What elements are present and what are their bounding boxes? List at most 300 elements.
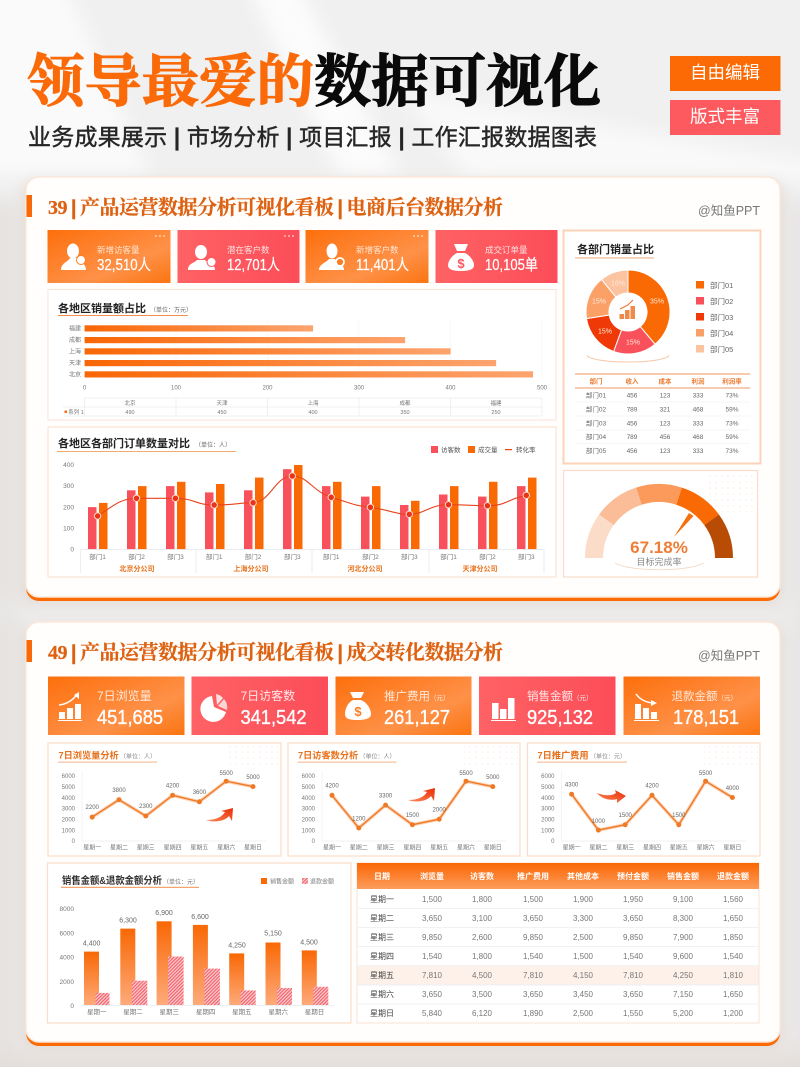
legend: 销售金额 [270,878,294,886]
department table: 123 [660,448,671,455]
line: 5500 [459,771,473,777]
y axis [63,462,74,554]
table rows: 4,500 [472,971,493,980]
department table: 123 [660,392,671,400]
line: 1500 [619,813,633,819]
table rows: 4,150 [573,971,594,980]
table rows: 6,120 [472,1009,493,1018]
data table [63,398,542,416]
line: 4300 [565,782,579,788]
brand mark: @知鱼PPT [698,204,760,218]
heading: （单位：人） [120,752,156,760]
heading: 7日访客数分析 [298,750,358,760]
line: 5000 [486,775,500,781]
axis: 1000 [541,828,555,834]
data table: 350 [400,410,410,416]
data table: 系列 1 [68,408,84,416]
y axis: 100 [63,526,74,532]
subtitle: 业务成果展示 | 市场分析 | 项目汇报 | 工作汇报数据图表 [28,124,597,150]
x axis: 星期六 [268,1007,288,1016]
heading [61,874,199,888]
axis and groups: 上海分公司 [234,564,268,573]
axis and groups [81,550,544,573]
axis: 星期一 [323,844,341,852]
legend [696,280,733,354]
KPI card: 潜在客户数 [178,230,300,283]
category labels: 北京 [69,370,81,378]
KPI card: 7日访客数: 341,542 [240,707,306,729]
axis: 星期日 [723,844,741,852]
table rows: 1,550 [623,1009,644,1018]
panel: dashboard 49 [22,622,784,1049]
KPI card: 销售金额 [479,676,616,735]
line: 2300 [139,804,153,810]
arrow [597,790,626,803]
value labels: 4,400 [83,940,101,948]
arrow [206,808,233,821]
line [565,771,740,833]
legend: 部门01 [710,280,733,290]
table header: 预付金额 [617,871,649,881]
KPI card: 7日访客数 [192,676,328,735]
line: 1000 [592,819,606,825]
table rows: 7,900 [673,933,694,942]
table rows: 3,650 [623,914,644,923]
axis: 0 [72,839,76,845]
KPI card: 退款金额: 178,151 [673,707,739,729]
value labels: 5,150 [264,930,282,938]
table header: 推广费用 [517,871,549,881]
line: 4200 [166,784,180,790]
chart heading: 各地区销量额占比 [58,301,146,315]
table rows: 9,100 [673,895,694,904]
panel: 目标完成率 gauge [564,470,758,577]
x axis: 星期四 [196,1008,215,1016]
heading [298,750,396,763]
data table: 400 [308,410,318,416]
table rows: 9,850 [523,933,544,942]
table header: 浏览量 [420,871,444,881]
line: 2200 [86,805,100,811]
axis and groups: 部门1 [89,552,106,561]
gauge label: 目标完成率 [636,556,682,567]
x axis: 星期三 [160,1008,180,1016]
icon: money bag: $ [354,704,362,719]
icon: money bag: $ [457,256,465,271]
KPI card: 新增访客量 [48,230,170,283]
table rows: 星期二 [370,914,394,923]
axis: 星期六 [217,844,235,852]
refund bars [96,956,328,1005]
table rows: 7,150 [673,990,694,999]
value axis: 500 [537,386,548,392]
axis: 2000 [62,818,76,824]
panel: 销售金额&退款金额分析 bar chart [48,863,351,1023]
axis and groups: 河北分公司 [348,564,382,573]
table rows: 1,500 [523,895,544,904]
table rows: 1,900 [573,895,594,904]
table rows: 2,600 [472,933,493,942]
arrow [408,788,435,801]
icon: bars with arrow [620,300,635,319]
axis [62,771,266,852]
value labels: 6,900 [155,910,173,917]
axis and groups: 部门3 [167,552,184,561]
icon: falling bars [634,694,659,721]
KPI card: 新增客户数: 11,401人 [356,256,409,274]
KPI card: 新增客户数 [306,230,428,283]
x axis [82,1005,334,1016]
department table: 468 [693,434,704,441]
table rows: 3,650 [623,990,644,999]
department table: 成本 [658,376,672,386]
chart heading: （单位：人） [195,441,231,449]
icon: person [61,244,86,270]
department table: 部门01 [586,390,606,400]
department table: 333 [693,392,704,400]
table rows: 1,500 [422,895,443,904]
data table: 北京 [124,399,136,407]
axis: 6000 [302,774,316,780]
value labels [83,910,318,950]
KPI card: 成交订单量 [436,230,558,283]
table rows: 星期日 [370,1009,394,1018]
donut chart: 15% [626,340,640,346]
department table: 456 [627,448,638,455]
y axis: 2000 [60,979,74,986]
table rows: 1,540 [723,952,744,961]
icon: person with info [188,245,216,270]
line: 3600 [193,790,207,796]
table rows: 9,850 [623,933,644,942]
KPI card: 销售金额: 925,132 [527,707,593,729]
data table: 490 [125,410,135,416]
KPI card: 成交订单量: 成交订单量 [485,245,528,255]
data table: 成都 [399,399,411,407]
section heading 39: 39 | 产品运营数据分析可视化看板 | 电商后台数据分析 [48,195,503,219]
axis: 0 [551,839,555,845]
y axis: 200 [63,504,74,512]
axis: 3000 [62,806,76,812]
axis: 4000 [302,796,316,802]
axis [302,771,506,852]
axis and groups: 部门1 [440,552,457,561]
table rows: 3,300 [573,914,594,923]
KPI card: 7日浏览量: 7日浏览量 [97,688,152,703]
heading: （单位：人） [360,752,396,760]
y axis: 8000 [60,906,74,913]
axis: 星期二 [589,844,607,852]
axis: 2000 [302,818,316,824]
department table: 73% [725,392,739,400]
axis and groups: 部门3 [401,552,418,561]
line: 3300 [379,794,393,800]
axis: 星期二 [110,844,128,852]
value axis: 200 [262,386,273,392]
department table [575,374,750,455]
legend [261,878,334,886]
chart heading [58,301,192,316]
line: 5500 [220,771,234,777]
KPI card: 潜在客户数: 潜在客户数 [227,245,270,255]
panel: daily data table [357,863,759,1023]
axis: 6000 [62,774,76,780]
axis: 星期一 [83,844,101,852]
line [86,771,260,820]
heading [58,750,157,763]
table rows: 5,200 [673,1009,694,1018]
KPI card: 7日访客数: 7日访客数 [240,688,295,703]
heading: 各部门销量占比 [577,242,654,256]
x axis: 星期二 [123,1008,143,1016]
axis: 星期三 [137,844,155,852]
department table: 73% [725,448,739,455]
value labels: 4,500 [300,940,318,946]
axis: 3000 [302,806,316,812]
legend: 部门04 [710,328,733,338]
table rows: 2,500 [573,1009,594,1018]
chart heading [57,436,236,452]
icon: pie [200,694,227,722]
axis and groups: 天津分公司 [462,564,498,573]
department table: 部门02 [586,404,606,414]
department table: 456 [627,420,638,428]
department table: 456 [627,392,638,400]
table rows: 3,650 [422,990,443,999]
table rows: 1,540 [523,952,544,961]
KPI card: 销售金额: 销售金额（元） [527,689,592,703]
y axis: 400 [63,462,74,469]
table rows: 1,800 [472,895,493,904]
line: 4000 [726,786,740,792]
table rows: 3,650 [523,914,544,923]
KPI card: 成交订单量: 10,105单 [485,256,538,274]
y axis: 0 [70,1003,74,1010]
data table: 450 [217,410,227,416]
line: 1200 [352,816,366,822]
orange bars [99,465,536,549]
table rows: 星期六 [370,989,394,999]
badge: 版式丰富 [670,100,780,135]
gauge arc [585,484,733,558]
icon: bars [491,698,516,721]
heading: 销售金额&退款金额分析 [62,874,162,887]
donut chart: 15% [598,328,612,336]
axis: 星期四 [164,844,182,852]
value axis: 400 [445,386,456,392]
value labels: 4,250 [228,942,246,950]
department table: 部门05 [586,446,606,455]
badge: 自由编辑: 自由编辑 [690,62,760,82]
section tick [26,640,32,662]
legend: 部门03 [710,312,733,322]
table rows: 3,100 [472,914,493,923]
section heading 49: 49 | 产品运营数据分析可视化看板 | 成交转化数据分析 [48,640,503,664]
data table: 福建 [490,399,502,407]
table header: 日期 [374,871,390,881]
badge: 版式丰富: 版式丰富 [690,106,760,126]
table rows: 星期五 [370,971,394,980]
table rows [370,895,744,1018]
line [325,771,500,830]
axis and groups: 部门2 [362,552,379,561]
department table: 利润率 [722,376,742,386]
axis: 星期日 [484,844,502,852]
table rows: 1,200 [723,1009,744,1018]
table rows: 1,650 [723,990,744,999]
axis: 6000 [541,774,555,780]
KPI card: 退款金额: 退款金额（元） [672,689,737,703]
donut chart: 35% [650,298,664,306]
legend [431,445,536,454]
department table: 59% [725,406,739,414]
x axis: 星期五 [232,1008,252,1016]
axis and groups: 部门3 [284,552,301,561]
y axis: 6000 [60,930,74,938]
red bars [88,469,526,549]
axis: 3000 [541,806,555,812]
axis and groups: 北京分公司 [120,564,154,573]
legend: 部门05 [710,344,733,354]
table rows: 星期一 [370,895,394,904]
x axis: 星期日 [305,1008,324,1016]
department table: 收入 [626,376,639,386]
y axis: 0 [70,546,74,554]
table rows: 1,540 [623,952,644,961]
axis: 星期三 [377,844,395,852]
KPI card: 推广费用: 261,127 [384,707,450,729]
axis and groups: 部门2 [245,552,262,561]
axis and groups: 部门2 [479,552,496,561]
table rows: 1,800 [472,952,493,961]
line: 4200 [325,784,339,790]
heading: 7日推广费用 [538,750,589,760]
line: 5000 [246,775,260,781]
gauge needle [674,513,694,537]
heading: （单位：元） [163,878,199,886]
value labels: 6,600 [191,914,209,921]
KPI card: 潜在客户数: 12,701人 [227,256,280,274]
axis: 4000 [541,796,555,802]
panel: dashboard 39 [22,177,784,604]
axis: 2000 [541,818,555,824]
legend: 访客数 [441,445,461,454]
line: 4200 [645,784,659,790]
department table: 73% [725,420,739,428]
KPI card: 推广费用: 推广费用（元） [384,689,450,703]
line: 3800 [112,788,126,794]
panel: 各地区各部门订单数量对比 combo chart [48,427,556,577]
department table: 333 [693,448,704,455]
department table: 59% [725,434,739,441]
department table: 123 [660,420,671,428]
table rows: 7,810 [523,971,544,980]
table rows: 7,810 [623,971,644,980]
axis and groups: 部门1 [206,552,223,561]
axis: 星期四 [403,844,421,852]
axis: 1000 [62,828,76,834]
table header: 销售金额 [667,871,699,881]
axis: 星期三 [616,844,634,852]
axis and groups: 部门1 [323,552,340,561]
KPI card: 新增访客量: 32,510人 [97,256,151,274]
value axis: 300 [354,386,365,392]
data table: 250 [491,410,501,416]
table header: 访客数 [470,871,494,881]
line: 5500 [699,771,713,777]
department table: 321 [660,406,671,414]
data table: 天津 [216,400,228,407]
axis: 星期五 [430,844,448,852]
table rows: 9,850 [422,933,443,942]
table rows: 1,650 [723,914,744,923]
axis: 0 [312,839,316,845]
axis: 5000 [62,785,76,791]
table rows: 9,600 [673,952,694,961]
KPI card: 新增访客量: 新增访客量 [97,245,140,255]
axis: 星期四 [643,844,661,852]
chart heading: （单位：万元） [150,306,192,314]
icon: person with magnifier [319,244,344,270]
table rows: 3,500 [472,990,493,999]
table rows: 1,950 [623,895,644,904]
icon: rising bars [58,692,82,721]
panel: 各地区销量额占比 bar chart [48,290,556,420]
department table: 利润 [692,376,705,386]
table rows: 1,500 [573,952,594,961]
table rows: 1,890 [523,1009,544,1018]
table rows: 8,300 [673,914,694,923]
table rows: 1,850 [723,933,744,942]
KPI card: 7日浏览量 [48,676,184,735]
y axis: 300 [63,483,74,490]
table rows: 1,560 [723,895,744,904]
category labels: 上海 [69,348,81,356]
panel: 各部门销量占比 [564,230,760,464]
table rows: 3,650 [422,914,443,923]
category labels: 天津 [69,360,81,367]
KPI card: 推广费用 [336,676,472,735]
panel: 7日推广费用 line chart [528,743,760,856]
axis: 星期五 [670,844,688,852]
x axis: 星期一 [87,1008,107,1016]
category labels: 成都 [69,336,81,344]
chart heading: 各地区各部门订单数量对比 [58,436,190,450]
table header [357,863,759,889]
bars [85,325,533,378]
axis and groups: 部门2 [128,552,145,561]
y axis: 4000 [60,954,74,962]
y axis [60,906,74,1010]
department table: 部门 [590,376,602,386]
donut chart: 16% [611,280,625,288]
heading [537,750,627,763]
axis: 星期日 [244,844,262,852]
category labels [69,324,81,378]
value labels: 6,300 [119,918,137,924]
department table: 789 [627,434,638,441]
department table: 部门03 [586,418,606,428]
axis: 5000 [541,785,555,791]
donut chart: 15% [592,298,606,306]
category labels: 福建 [69,324,81,332]
legend: 转化率 [516,445,536,454]
donut chart [586,270,670,362]
legend: 部门02 [710,296,733,306]
title: 领导最爱的数据可视化 [27,51,601,114]
gauge value: 67.18% [630,538,688,557]
axis: 星期二 [350,844,368,852]
